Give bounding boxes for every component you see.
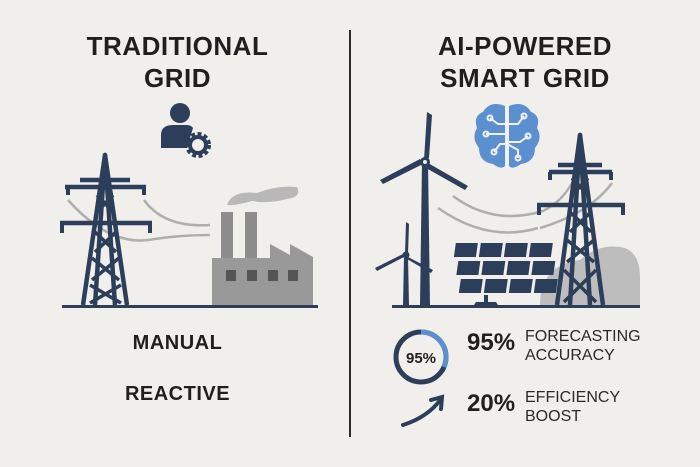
ground left — [62, 305, 318, 308]
title: traditional grid: GRID — [144, 63, 211, 93]
title: AI-powered smart grid: SMART GRID — [440, 63, 610, 93]
label: reactive: REACTIVE — [125, 383, 230, 405]
icon: solar panel — [449, 243, 563, 305]
icon: arrow up — [403, 397, 442, 425]
icon: AI brain — [474, 104, 540, 168]
wires left — [68, 200, 210, 240]
stat: 95% forecasting accuracy: ACCURACY — [525, 347, 615, 364]
title: AI-powered smart grid: AI-POWERED — [438, 31, 612, 61]
hill — [540, 246, 640, 305]
title: traditional grid — [86, 31, 268, 93]
icon: left transmission tower — [60, 155, 152, 305]
icon: person with gear — [161, 103, 208, 155]
divider — [349, 30, 351, 437]
chart: ring 95% — [396, 332, 446, 382]
icon: factory — [212, 187, 313, 305]
stat: 20% efficiency boost: EFFICIENCY — [525, 389, 620, 406]
ground right — [392, 305, 640, 308]
title: traditional grid: TRADITIONAL — [87, 31, 268, 61]
stat: 20% efficiency boost: BOOST — [525, 408, 581, 425]
stat: 20% efficiency boost: 20% — [467, 390, 515, 417]
icon: big wind turbine — [380, 112, 468, 306]
chart: ring 95%: 95% — [406, 350, 436, 367]
stat: 95% forecasting accuracy: 95% — [467, 329, 515, 356]
stat: 20% efficiency boost — [467, 389, 620, 425]
stat: 95% forecasting accuracy: FORECASTING — [525, 328, 641, 345]
icon: small wind turbine — [375, 222, 433, 306]
icon: right transmission tower — [537, 135, 625, 305]
title: AI-powered smart grid — [438, 31, 612, 93]
stat: 95% forecasting accuracy — [467, 328, 641, 364]
label: manual: MANUAL — [133, 332, 222, 354]
wires right — [438, 181, 612, 232]
